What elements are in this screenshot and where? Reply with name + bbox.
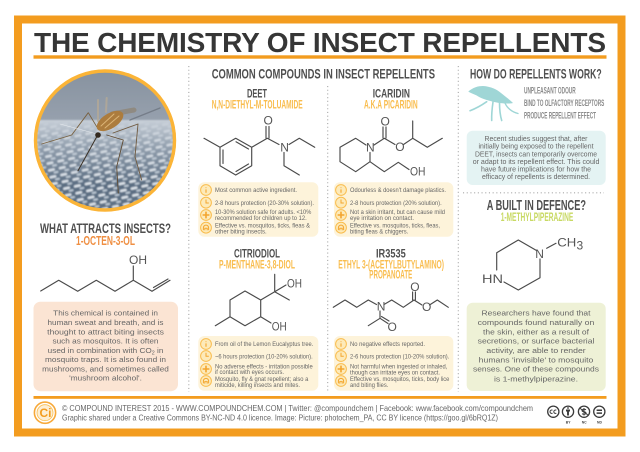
row: effectiveness: Mosquito, fly & gnat repellent; also a [215,376,309,383]
heading: common compounds: COMMON COMPOUNDS IN INSECT REPELLENTS [212,65,435,81]
row: safety [201,209,312,222]
row: effectiveness: miticide, killing insects and mites. [215,382,300,389]
text box: octenol description: mushrooms, and sometimes called [42,364,169,373]
row: active ingredient: Most common active ingredient. [215,187,297,194]
panel: DEET [198,86,318,237]
molecule: icaridin: N [366,140,375,154]
info box: IR3535 [334,336,453,391]
molecule: 1-octen-3-ol [41,253,170,291]
text box: octenol description: used in combination with CO [48,346,144,355]
row: effectiveness: Effective vs. mosquitos, ticks, fleas, [350,222,440,230]
subheading: 1-octen-3-ol: 1-OCTEN-3-OL [76,234,135,248]
text box: researchers: is 1-methylpiperazine. [494,374,578,383]
icons: creative commons licence: ND [597,420,602,424]
molecule: DEET: O [264,114,273,128]
text box: recent studies: have future implications for how the [481,164,591,173]
chemical name: IR3535: ETHYL 3-(ACETYLBUTYLAMINO) [338,257,444,271]
text box: recent studies: or adapt to its repellent effect. This could [473,157,599,166]
text box: researchers: secretions, or surface bacterial [478,337,595,346]
text box: octenol description: This chemical is contained in [53,309,158,318]
row: protection time: 2-8 hours protection (20-30% solution). [215,200,314,207]
row: properties: Odourless & doesn't damage plastics. [350,187,446,194]
list: repellent effects [524,85,604,121]
molecule: IR3535: O [422,300,431,314]
info box: icaridin [334,182,453,237]
row: safety [201,364,313,376]
text box: researchers: humans 'invisible' to mosquito [479,355,593,364]
text box: recent studies: initially being exposed to the repellent [478,142,594,151]
molecule: 1-methylpiperazine [482,236,584,290]
row: safety: if contact with eyes occurs. [215,369,284,376]
text box: researchers: senses. One of these compounds [473,365,599,374]
row: protection time: 2-8 hours protection (20% solution). [350,200,442,207]
molecule: icaridin [340,114,442,178]
text box: octenol description [34,302,178,391]
text box: octenol description: 'mushroom alcohol'. [69,374,142,383]
row: effectiveness [201,376,309,389]
text box: recent studies: DEET, insects can temporarily overcome [475,149,597,158]
icons: creative commons licence: NC [582,420,587,424]
row: effectiveness: Effective vs. mosquitos, ticks, body lice [350,376,450,383]
row: effectiveness [201,222,311,236]
row: effectiveness: and biting flies. [350,382,388,389]
row: effectiveness [336,376,450,389]
compound name: citriodiol: CITRIODIOL [234,247,280,261]
row: safety: though can irritate eyes on contact. [350,370,440,376]
panel: what attracts insects [30,69,180,391]
photo: mosquito on denim [30,69,180,214]
credits text [62,403,533,423]
info box: DEET [198,182,318,237]
molecule: 1-methylpiperazine: HN [482,272,503,286]
chemical name: DEET: N,N-DIETHYL-M-TOLUAMIDE [212,97,303,111]
molecule: IR3535: N [377,300,385,314]
row: safety: eye irritation on contact. [350,215,414,222]
title: THE CHEMISTRY OF INSECT REPELLENTS [34,27,606,58]
text box: octenol description: human sweat and breath, and is [48,318,164,327]
row: safety: Not a skin irritant, but can cause mild [350,209,445,216]
molecule: icaridin: O [380,114,390,128]
molecule: citriodiol: OH [287,276,302,290]
compound name: icaridin: ICARIDIN [373,86,410,100]
text box: researchers: Researchers have found that [482,309,591,318]
molecule: 1-methylpiperazine: CH [557,236,576,250]
text box: researchers: compounds found naturally on [478,318,594,327]
panel: icaridin [334,86,453,237]
compound name: DEET: DEET [247,86,267,100]
text box: octenol description: mosquito traps. It is also found in [45,355,166,364]
molecule: DEET [204,114,315,175]
row: safety: 10-30% solution safe for adults. <10% [215,209,312,216]
molecule: 1-octen-3-ol: OH [129,253,147,267]
text box: researchers: the skin, either as a result of [483,327,590,336]
icon: mosquito silhouette [468,86,518,120]
molecule: IR3535: O [388,320,397,334]
molecule: 1-methylpiperazine: N [535,247,544,261]
chemical name: IR3535 [338,257,444,282]
row: effectiveness: Effective vs. mosquitos, ticks, fleas & [215,222,311,230]
subheading: 1-methylpiperazine: 1-METHYLPIPERAZINE [501,210,573,224]
chemical name: icaridin: A.K.A PICARIDIN [364,97,418,111]
molecule: DEET: N [280,140,289,154]
text box: recent studies [467,131,606,185]
row: effectiveness: biting fleas & chiggers. [350,228,409,236]
text box: octenol description: in [155,346,163,355]
info box: citriodiol [198,336,318,391]
molecule: IR3535 [333,280,448,334]
icons: creative commons licence [548,406,605,424]
molecule: IR3535: O [410,280,420,294]
panel: IR3535 [333,247,453,391]
list: repellent effects: UNPLEASANT ODOUR [524,85,576,95]
molecule: 1-methylpiperazine: 3 [576,238,584,252]
text box: researchers [467,303,606,391]
molecule: icaridin: O [395,140,405,154]
chemical name: citriodiol: P-MENTHANE-3,8-DIOL [219,257,295,271]
footer [34,396,606,424]
credits text: Graphic shared under a Creative Commons BY-NC-ND 4.0 licence. Image: Picture: photochem_PA, CC BY licence (https://goo.gl/6bRQ1Z) [62,413,498,423]
logo: compound interest [34,402,56,423]
credits text: © COMPOUND INTEREST 2015 - WWW.COMPOUNDCHEM.COM | Twitter: @compoundchem | Facebook: www.facebook.com/compoundchem [62,403,533,413]
row: safety: recommended for children up to 12. [215,215,307,222]
molecule: citriodiol: OH [272,320,287,334]
row: protection time: 2-6 hours protection (10-20% solution). [350,354,449,361]
icons: creative commons licence: BY [566,420,571,424]
row: effectiveness: other biting insects. [215,228,267,236]
text box: researchers: activity, are able to render [486,346,586,355]
logo: compound interest: Ci [40,406,52,420]
molecule: citriodiol [215,274,302,334]
chemical name: IR3535: PROPANOATE [369,268,412,282]
panel: a built in defence [467,197,606,391]
molecule: icaridin: OH [410,164,426,178]
compound name: IR3535: IR3535 [376,247,406,261]
heading: what attracts insects: WHAT ATTRACTS INSECTS? [40,220,171,236]
row: effectiveness [336,222,440,236]
row: safety [336,209,445,222]
text box: recent studies: efficacy of repellents is determined. [482,172,590,181]
row: safety: Not harmful when ingested or inhaled, [350,364,448,370]
row: source: From oil of the Lemon Eucalyptus tree. [215,341,313,348]
text box: octenol description: thought to attract biting insects [47,327,164,336]
row: side effects: No negative effects reported. [350,341,425,348]
text box: recent studies: Recent studies suggest that, after [484,134,588,143]
row: safety: No adverse effects - irritation possible [215,364,313,370]
text box: octenol description: such as mosquitos. It is often [52,337,158,346]
panel: how do repellents work [467,65,606,185]
panel: citriodiol [198,247,318,391]
row: safety [336,364,448,376]
row: protection time: ~6 hours protection (10-20% solution). [215,354,313,360]
text box: octenol description: 2 [152,350,155,356]
